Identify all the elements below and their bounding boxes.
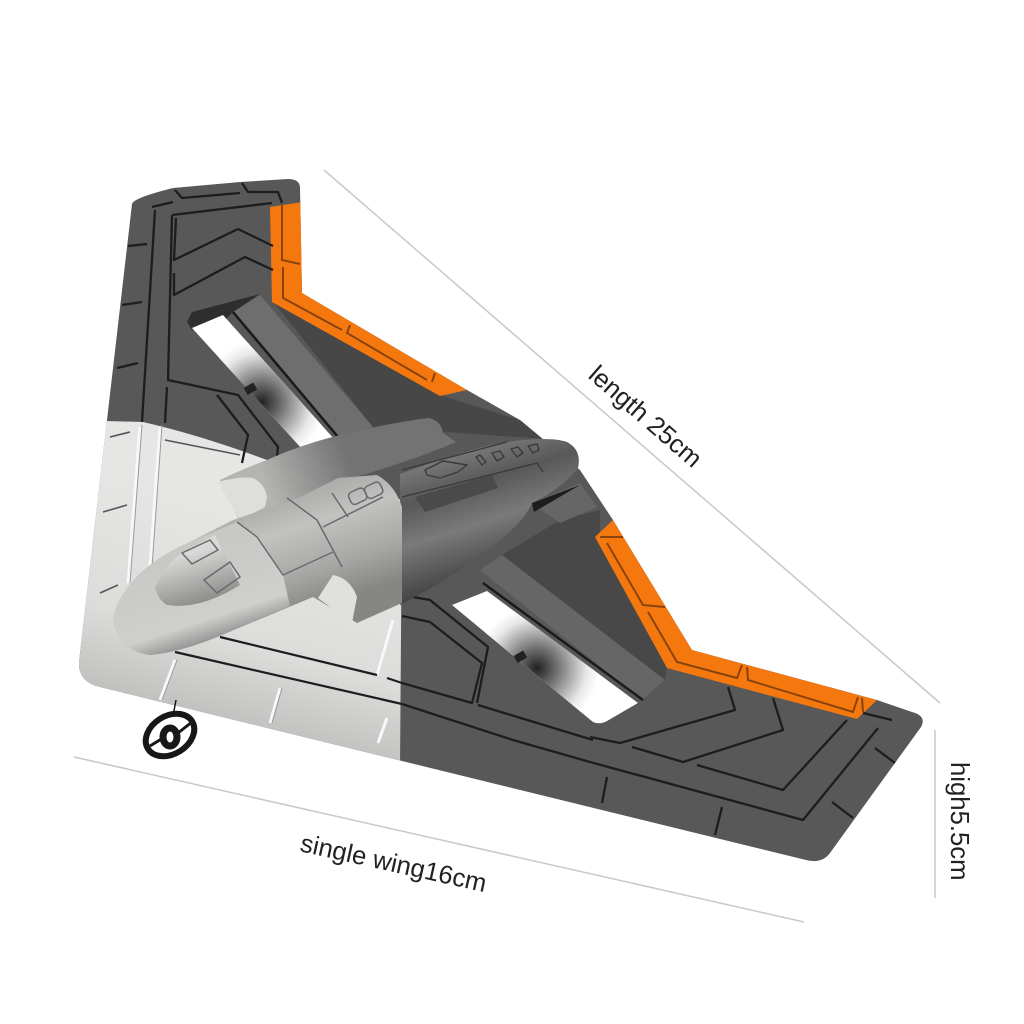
cockpit dark panel: [415, 475, 498, 512]
wheel ring: [138, 705, 202, 765]
panel lines: orange area: [282, 205, 863, 712]
label: single wing: single wing16cm: [298, 830, 489, 898]
windows and seams: [182, 481, 384, 593]
body light section: [113, 475, 402, 655]
right tail fin: [532, 483, 597, 523]
wing dark surface: [60, 170, 940, 880]
dark zone behind right leading edge: [502, 510, 667, 680]
wire: [173, 700, 176, 716]
label: height: high5.5cm: [945, 762, 973, 881]
dimension line: length: [324, 170, 940, 703]
body dark section: [400, 439, 579, 605]
opening edge: [233, 312, 338, 437]
nose rim: [113, 522, 290, 655]
grey strut: left: [233, 295, 373, 437]
motor shaft: [244, 383, 257, 395]
wing light surface: [70, 420, 402, 770]
label: length: length 25cm: [583, 360, 707, 473]
orange edge: left wing: [270, 202, 467, 396]
orange edge: right wing: [595, 520, 877, 719]
panel lines: dark area: [117, 183, 895, 835]
lower fin: [318, 575, 357, 623]
dark zone behind left leading edge: [276, 304, 543, 439]
panel lines: light area: [100, 425, 402, 743]
nose cone: [155, 535, 240, 606]
plane wing: [60, 170, 940, 880]
right tail fin shadow: [532, 485, 580, 512]
upper engine pod: [220, 418, 456, 522]
opening shadow: [187, 294, 260, 330]
motor shaft: [514, 651, 527, 663]
opening disc: [452, 591, 638, 723]
dimension line: single wing: [74, 757, 804, 922]
opening disc: [192, 315, 335, 450]
wheel spoke: [150, 722, 192, 746]
fuselage: [113, 418, 597, 655]
motor opening: left: [187, 294, 338, 464]
infographic: flying wing toy plane with dimensions: [74, 170, 970, 923]
motor opening: right: [452, 583, 643, 730]
wheel hub: [163, 728, 177, 746]
grey strut: right: [480, 555, 665, 700]
steering wheel: [138, 700, 202, 765]
upper fin: [218, 478, 267, 520]
opening edge: [483, 583, 643, 700]
dimension line: height: [934, 730, 936, 898]
